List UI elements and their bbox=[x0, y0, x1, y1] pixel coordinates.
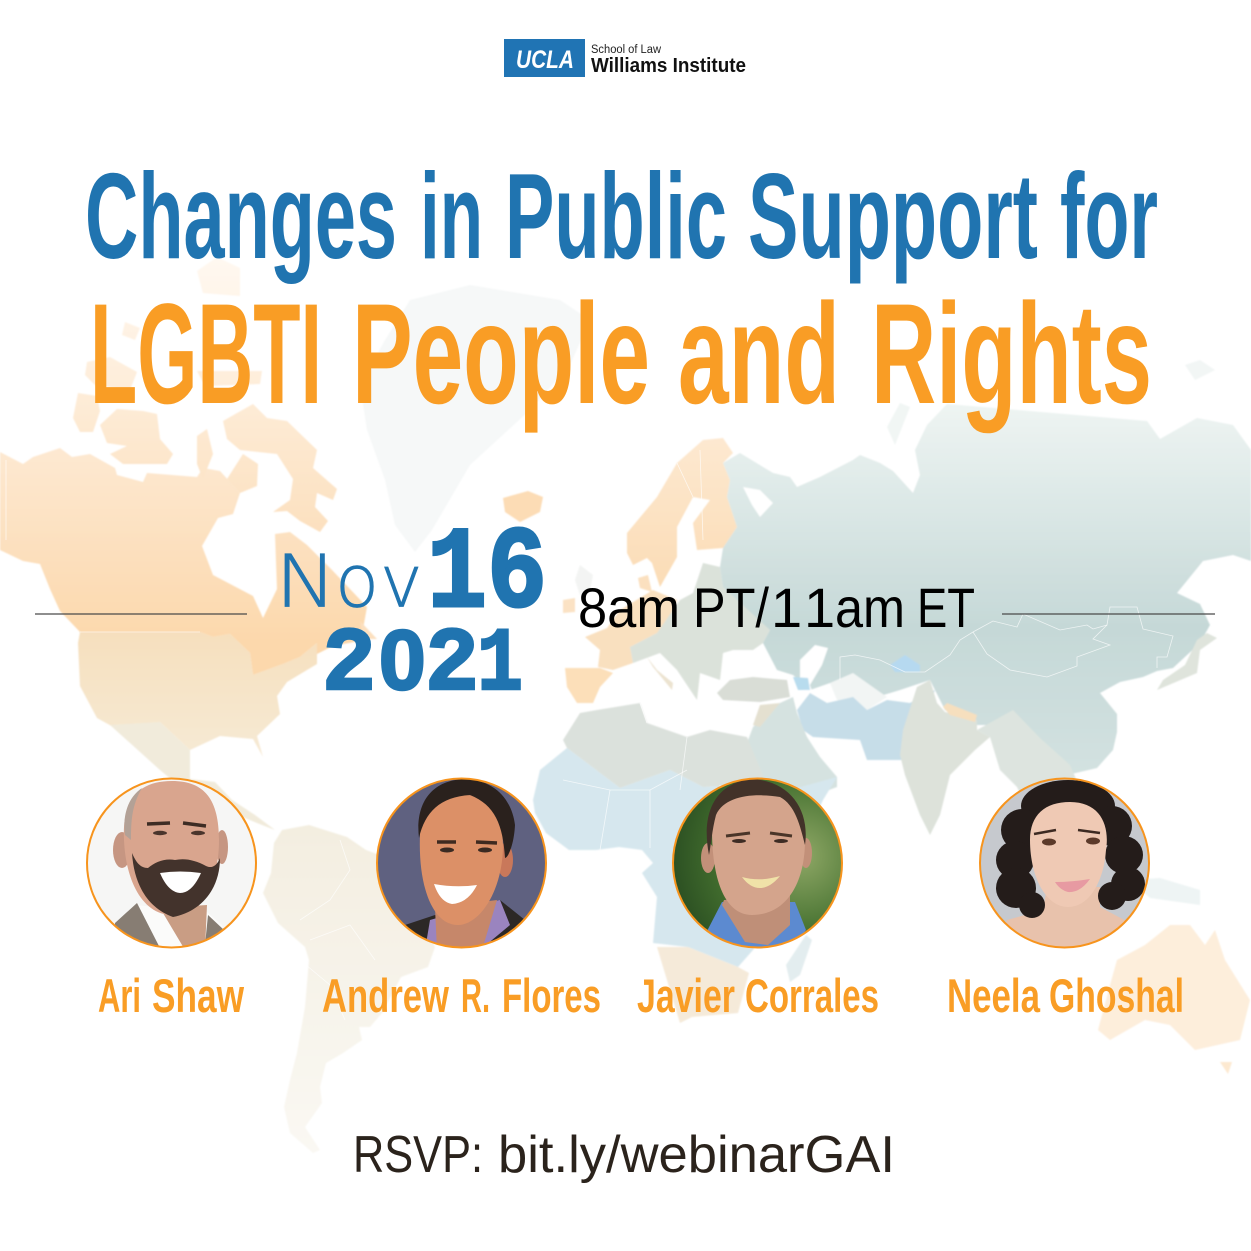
UCLA Williams Institute logo: UCLA bbox=[516, 46, 574, 74]
Arabian Peninsula bbox=[747, 697, 837, 797]
Iran, Afghanistan, Pakistan bbox=[797, 690, 935, 760]
Turkey bbox=[717, 677, 790, 702]
South America bbox=[263, 825, 435, 1153]
title line 2 bbox=[90, 275, 1152, 434]
title line 1: in bbox=[420, 148, 483, 284]
left divider line bbox=[35, 613, 247, 615]
event time: PT/ bbox=[693, 576, 769, 639]
speaker 1 portrait bbox=[85, 777, 260, 955]
Italy bbox=[647, 657, 673, 690]
UCLA Williams Institute logo: Williams Institute bbox=[591, 55, 746, 77]
Turkmenistan bbox=[830, 673, 887, 710]
title line 1: Support bbox=[748, 148, 1038, 284]
Greenland bbox=[360, 285, 590, 552]
Israel and Jordan bbox=[753, 703, 780, 727]
date: year: 0 bbox=[379, 613, 426, 707]
Eastern Europe bbox=[630, 563, 770, 700]
date: month: o bbox=[335, 540, 379, 624]
title line 2: LGBTI bbox=[90, 275, 322, 434]
event time bbox=[578, 576, 975, 639]
Caspian Sea bbox=[800, 645, 828, 700]
date: month: N bbox=[275, 540, 337, 624]
speaker name: Andrew R. Flores bbox=[322, 969, 601, 1022]
Tajikistan and Azerbaijan bbox=[890, 655, 920, 672]
speaker name: Ari Shaw: Ari bbox=[98, 969, 141, 1022]
Scandinavia bbox=[627, 438, 737, 587]
speaker 4 portrait bbox=[975, 777, 1155, 952]
date: year: 2 bbox=[425, 615, 479, 717]
Southeast Asia bbox=[977, 710, 1085, 835]
speaker name: Ari Shaw bbox=[98, 969, 244, 1022]
United States bbox=[78, 632, 317, 757]
speaker name: Ari Shaw: Shaw bbox=[152, 969, 244, 1022]
North Africa bbox=[563, 703, 767, 788]
speaker name: Neela Ghoshal: Neela bbox=[947, 969, 1041, 1022]
speaker 2 portrait bbox=[375, 777, 550, 952]
Japan bbox=[1157, 633, 1217, 690]
title line 1: Public bbox=[505, 148, 727, 284]
title line 2: and bbox=[678, 275, 840, 434]
speaker name: Javier Corrales: Corrales bbox=[745, 969, 879, 1022]
event time: ET bbox=[917, 576, 975, 639]
Denmark bbox=[638, 575, 652, 592]
speaker name: Andrew R. Flores: R. bbox=[461, 969, 490, 1022]
RSVP link: RSVP: bbox=[353, 1126, 483, 1184]
speaker name: Neela Ghoshal: Ghoshal bbox=[1049, 969, 1184, 1022]
right divider line bbox=[1002, 613, 1215, 615]
date: year: 2 bbox=[322, 615, 376, 717]
world map background bbox=[0, 257, 1251, 1153]
speaker name: Javier Corrales: Javier bbox=[637, 969, 735, 1022]
UCLA Williams Institute logo: School of Law bbox=[591, 44, 662, 56]
Southern Africa bbox=[657, 947, 749, 1023]
Indonesia bbox=[1130, 878, 1200, 905]
country border lines bbox=[6, 450, 1173, 1020]
title line 1: for bbox=[1060, 148, 1158, 284]
Arctic islands bbox=[73, 257, 377, 639]
speaker name: Andrew R. Flores: Andrew bbox=[322, 969, 449, 1022]
date: month: v bbox=[380, 540, 423, 624]
speaker name: Neela Ghoshal bbox=[947, 969, 1184, 1022]
event time: 1 bbox=[771, 576, 802, 639]
event time: 8am bbox=[578, 576, 680, 639]
Central and West Africa bbox=[533, 748, 837, 967]
date: day: 16 bbox=[427, 509, 547, 641]
Canada and Alaska bbox=[0, 448, 370, 675]
Australia bbox=[1098, 925, 1250, 1050]
India bbox=[900, 680, 990, 835]
date: year bbox=[322, 613, 523, 717]
Spain and Portugal bbox=[565, 668, 613, 703]
event time: am bbox=[835, 576, 905, 639]
title line 1 bbox=[85, 148, 1158, 284]
date: month bbox=[275, 540, 423, 624]
title line 2: People bbox=[352, 275, 650, 434]
event time: 1 bbox=[804, 576, 835, 639]
Kamchatka and far north islands bbox=[1185, 360, 1215, 380]
RSVP link: bit.ly/webinarGAI bbox=[498, 1126, 895, 1184]
UCLA Williams Institute logo bbox=[504, 39, 746, 77]
speaker name: Andrew R. Flores: Flores bbox=[502, 969, 601, 1022]
title line 1: Changes bbox=[85, 148, 397, 284]
speaker 3 portrait bbox=[670, 777, 845, 952]
date: year: 1 bbox=[477, 615, 523, 717]
White Sea bbox=[743, 487, 773, 517]
Madagascar bbox=[786, 935, 812, 982]
speaker name: Javier Corrales bbox=[637, 969, 879, 1022]
Mexico and Central America bbox=[110, 722, 275, 830]
Iceland bbox=[503, 491, 543, 522]
Western Europe bbox=[585, 590, 677, 670]
Great Britain and Ireland bbox=[575, 565, 593, 595]
Nepal bbox=[943, 703, 977, 722]
Russia and Central and East Asia bbox=[720, 404, 1251, 775]
